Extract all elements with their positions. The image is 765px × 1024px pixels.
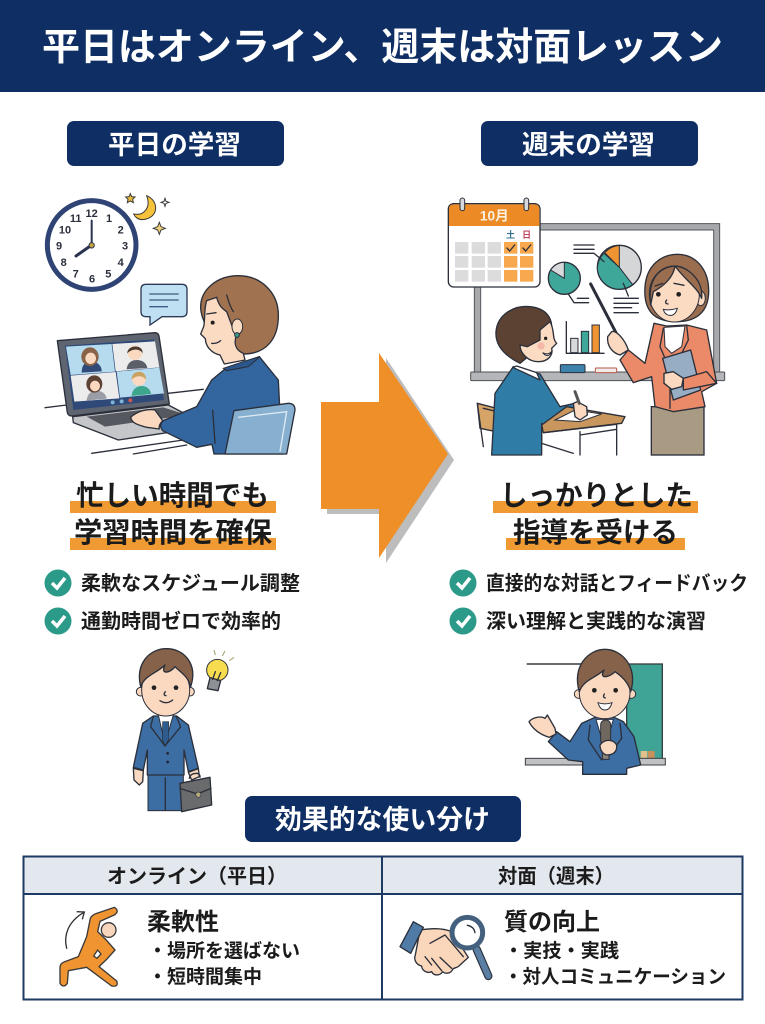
heading: weekend learning xyxy=(481,121,698,166)
icon: wall clock: 12 xyxy=(86,208,98,220)
heading: receive solid instruction xyxy=(493,480,698,550)
column: in person: 質の向上 xyxy=(504,909,600,936)
calendar: 10月 xyxy=(480,209,509,224)
checklist: weekday: 通勤時間ゼロで効率的 xyxy=(81,609,281,633)
heading: weekday learning xyxy=(67,121,284,166)
heading: receive solid instruction: しっかりとした xyxy=(500,480,693,511)
arrow: weekday to weekend xyxy=(321,353,454,563)
woman working xyxy=(131,276,283,454)
caller 4 xyxy=(132,372,151,396)
calendar xyxy=(448,198,540,287)
icon: wall clock: 2 xyxy=(118,225,124,237)
icon: wall clock: 1 xyxy=(106,213,112,225)
caller 1 xyxy=(81,347,102,373)
calendar: 土 xyxy=(506,229,515,240)
businessman xyxy=(133,649,199,811)
heading: effective use: 効果的な使い分け xyxy=(275,805,490,835)
caller 3 xyxy=(86,375,107,401)
column: online: オンライン（平日） xyxy=(107,865,287,888)
checklist: weekend: 直接的な対話とフィードバック xyxy=(486,572,748,595)
column: in person: ・実技・実践 xyxy=(504,940,619,962)
caller 2 xyxy=(127,345,147,369)
heading: secure study time xyxy=(70,480,276,550)
column: online: 柔軟性 xyxy=(147,909,219,936)
icon: wall clock: 8 xyxy=(61,257,67,269)
presenter xyxy=(529,649,641,774)
icon: wall clock: 9 xyxy=(56,240,62,252)
calendar: 日 xyxy=(522,230,531,240)
laptop with video call xyxy=(57,333,197,440)
checklist: weekend: 深い理解と実践的な演習 xyxy=(486,610,706,633)
illustration: online lesson at night xyxy=(45,194,295,454)
heading: secure study time: 忙しい時間でも xyxy=(76,480,269,511)
icon: wall clock: 6 xyxy=(89,273,95,285)
icon: wall clock: 11 xyxy=(70,213,81,225)
column: online xyxy=(60,865,300,988)
icon: speech bubble xyxy=(141,284,187,325)
icon: wall clock: 4 xyxy=(118,257,125,269)
desk lines xyxy=(45,389,203,454)
comparison table xyxy=(23,856,743,1000)
icon: light bulb xyxy=(207,650,234,691)
heading: effective use xyxy=(245,796,521,842)
icon: wall clock: 3 xyxy=(122,240,128,252)
blackboard xyxy=(525,664,665,765)
column: in person xyxy=(400,865,726,988)
checklist: weekday xyxy=(44,570,300,634)
icon: handshake and magnifier xyxy=(400,917,488,976)
checklist: weekday: 柔軟なスケジュール調整 xyxy=(81,572,300,595)
icon: moon and stars xyxy=(126,194,169,234)
icon: wall clock: 10 xyxy=(59,225,71,237)
icon: wall clock: 7 xyxy=(73,269,79,281)
office chair xyxy=(225,403,295,454)
teacher with pointer xyxy=(591,254,717,455)
icon: briefcase xyxy=(180,773,212,812)
heading: secure study time: 学習時間を確保 xyxy=(74,517,272,548)
title banner: 平日はオンライン、週末は対面レッスン xyxy=(42,27,723,69)
column: online: ・場所を選ばない xyxy=(148,940,300,962)
column: in person: 対面（週末） xyxy=(498,865,614,888)
illustration: in-person lesson at whiteboard xyxy=(448,198,725,455)
checklist: weekend xyxy=(450,570,748,634)
whiteboard xyxy=(471,224,725,381)
icon: stretching figure xyxy=(60,907,117,986)
icon: wall clock: 5 xyxy=(105,269,111,281)
column: in person: ・対人コミュニケーション xyxy=(504,966,726,988)
heading: receive solid instruction: 指導を受ける xyxy=(513,517,678,548)
column: online: ・短時間集中 xyxy=(148,966,262,988)
illustration: businessman with idea xyxy=(133,649,234,812)
student at desk xyxy=(477,306,625,455)
heading: weekday learning: 平日の学習 xyxy=(108,130,241,160)
illustration: presenter with microphone xyxy=(525,649,665,774)
icon: wall clock xyxy=(47,201,136,289)
heading: weekend learning: 週末の学習 xyxy=(522,130,655,160)
title banner xyxy=(0,0,765,92)
charts on whiteboard xyxy=(548,245,641,353)
